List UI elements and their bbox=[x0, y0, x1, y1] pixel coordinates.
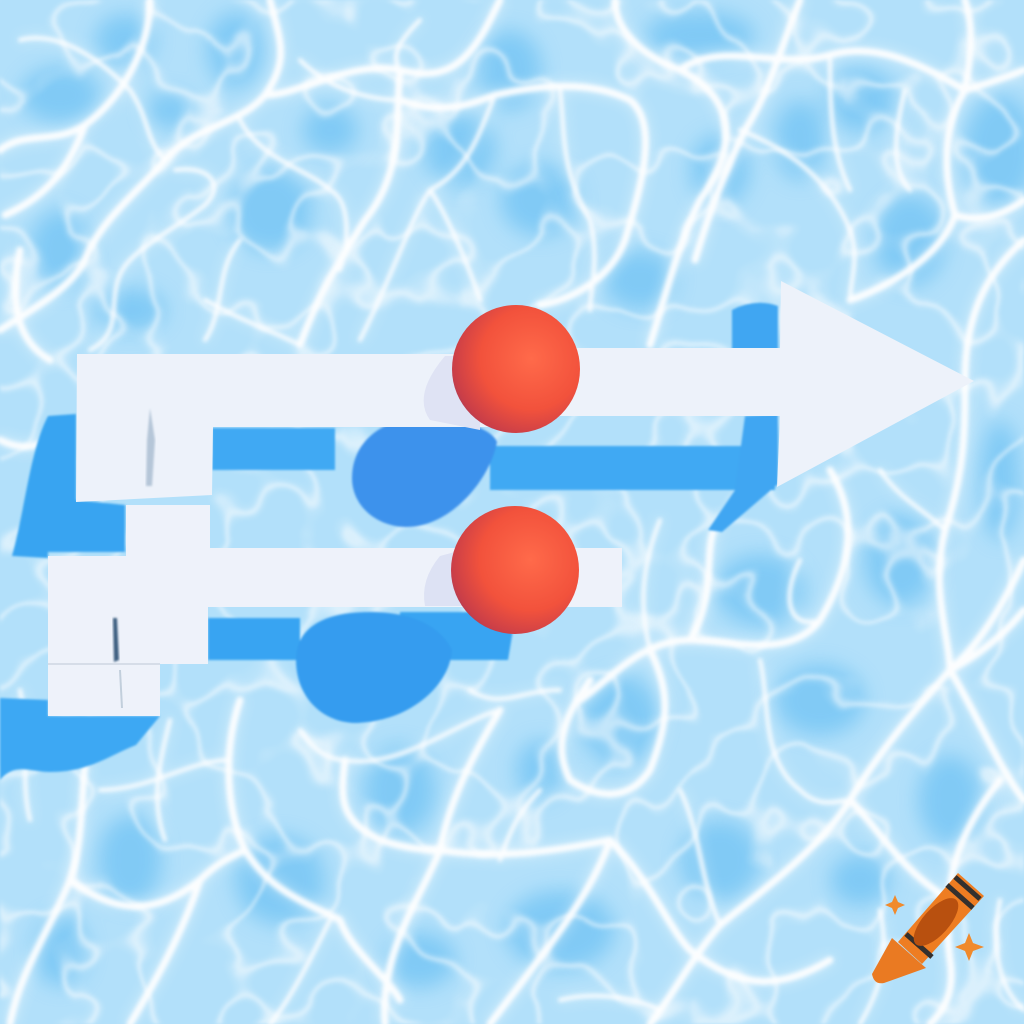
upper red ball bbox=[452, 305, 580, 433]
shadow: upper ball bbox=[352, 418, 497, 527]
shadow: lower bar bbox=[208, 612, 516, 660]
crayon body bbox=[898, 873, 984, 964]
lower arrow bar bbox=[48, 505, 622, 716]
shadow: upper bar left bbox=[12, 414, 125, 558]
shadow: arrow head bbox=[708, 303, 778, 532]
shadow: upper arrow shaft bbox=[212, 428, 775, 490]
shadow: lower ball bbox=[296, 612, 452, 723]
lower red ball bbox=[451, 506, 579, 634]
upper arrow bbox=[76, 281, 974, 502]
shadow: lower left block bbox=[0, 698, 160, 780]
sparkles bbox=[885, 895, 905, 915]
icon: crayon logo bbox=[872, 873, 984, 983]
shadows of the arrows and balls bbox=[0, 303, 778, 780]
